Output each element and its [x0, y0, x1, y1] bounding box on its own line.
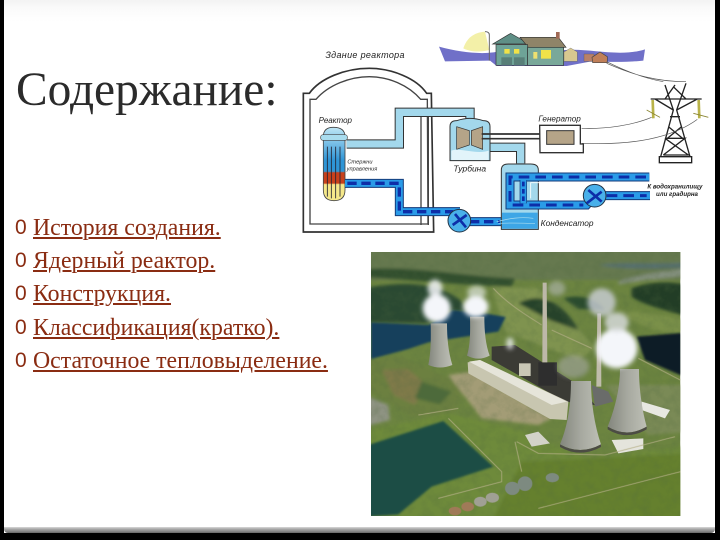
icon: transmission tower [647, 83, 708, 163]
main plant building [468, 345, 670, 453]
diagram: nuclear power plant scheme [303, 32, 708, 232]
list item: classification: 0 [15, 316, 27, 339]
cooling towers [428, 317, 647, 450]
label: control rods: управления [346, 166, 377, 172]
roads [418, 288, 680, 508]
turbine housing [450, 118, 490, 161]
landscape [365, 245, 692, 522]
label: reactor building: Здание реактора [325, 50, 405, 60]
shaft to generator [482, 134, 547, 139]
tower 2 [467, 317, 490, 359]
label: to reservoir: или градирна [656, 191, 699, 198]
label: turbine: Турбина [453, 164, 486, 174]
label: reactor: Реактор [319, 116, 353, 125]
title: Содержание: [16, 64, 277, 116]
label: generator: Генератор [538, 114, 581, 123]
label: condenser: Конденсатор [541, 218, 594, 228]
photo background [371, 252, 680, 516]
pipe: steam line [347, 112, 521, 163]
icon: cooling pump [583, 184, 606, 207]
tower 3 [560, 381, 601, 450]
generator [540, 125, 583, 153]
chimneys [542, 283, 601, 387]
reactor building wall [303, 68, 434, 232]
icon: village scene [439, 32, 645, 66]
list item: reactor: 0 [15, 249, 27, 272]
list item: residual heat: Остаточное тепловыделение. [33, 348, 328, 374]
tower 1 [428, 323, 452, 367]
steam plumes [423, 280, 637, 378]
list item: classification: Классификация(кратко). [33, 315, 279, 341]
lake [371, 310, 506, 359]
reactor vessel [321, 127, 347, 201]
photo grain texture [371, 267, 680, 440]
tower 4 [608, 369, 647, 432]
icon: feedwater pump [448, 209, 471, 232]
list item: construction: 0 [15, 282, 27, 305]
tower bases [560, 427, 647, 453]
list item: reactor: Ядерный реактор. [33, 248, 215, 274]
pond [368, 421, 493, 517]
pipes: cooling water circuit [510, 177, 650, 205]
label: to reservoir: К водохранилищу [647, 184, 703, 191]
list item: history: 0 [15, 216, 27, 239]
list item: residual heat: 0 [15, 349, 27, 372]
list item: construction: Конструкция. [33, 281, 171, 307]
photo: power plant aerial view [365, 245, 692, 522]
contents list [15, 215, 328, 374]
power lines [582, 62, 697, 144]
list item: history: История создания. [33, 215, 221, 241]
label: control rods: Стержни [347, 160, 373, 166]
dark reservoir right [637, 333, 682, 376]
storage tanks [449, 473, 559, 515]
condenser [497, 164, 538, 229]
pipe: feedwater loop [345, 183, 503, 222]
